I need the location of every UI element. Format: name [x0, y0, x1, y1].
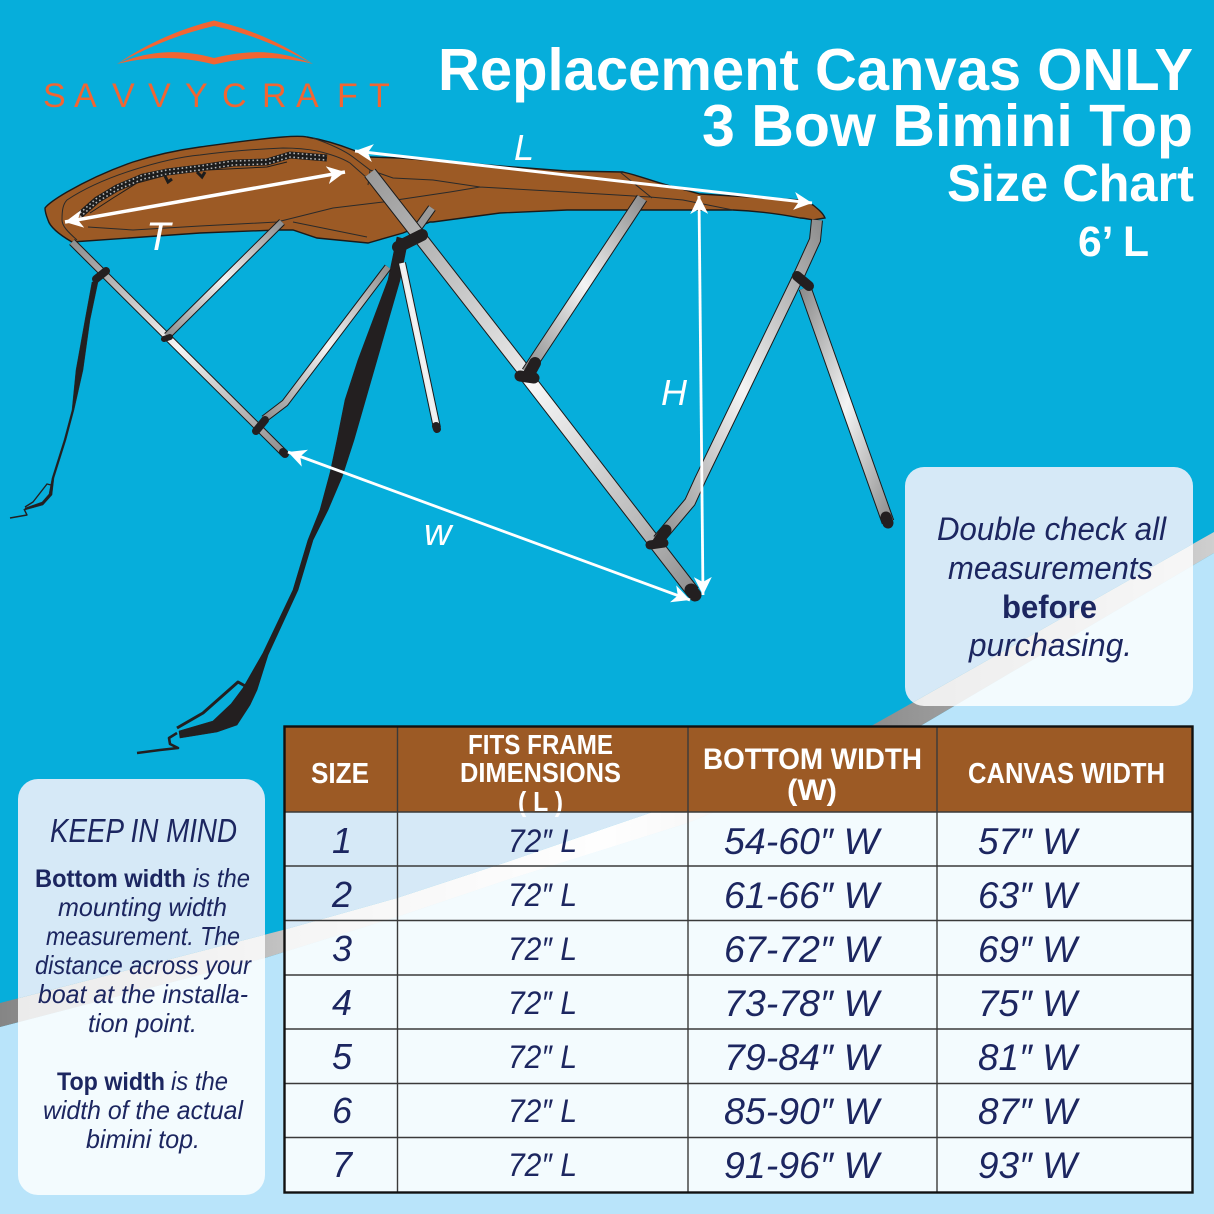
- main strap: [137, 237, 408, 753]
- arrow: H (height): [661, 196, 703, 595]
- text: top width note: width of the actual: [43, 1095, 244, 1125]
- frame clamps: back bow: [96, 271, 437, 454]
- title: Replacement Canvas ONLY: [438, 37, 1193, 103]
- table row 7: 72″ L: [508, 1147, 577, 1183]
- frame tubes: front bows: [370, 173, 888, 592]
- table header: SIZE: [311, 758, 369, 790]
- text: top width note: [43, 1066, 244, 1154]
- panel: double check callout: measurements: [948, 550, 1153, 586]
- table row 5: [332, 1036, 1080, 1078]
- size chart table: [284, 726, 1192, 1192]
- frame clamps: front bows: [398, 235, 888, 595]
- label: T: T: [146, 215, 173, 259]
- table row 7: [332, 1144, 1080, 1186]
- table row 4: 75″ W: [978, 983, 1080, 1024]
- table row 2: 72″ L: [508, 877, 577, 913]
- table row 6: 87″ W: [978, 1091, 1080, 1132]
- table header: (W): [787, 774, 837, 807]
- table header: BOTTOM WIDTH: [703, 743, 922, 776]
- panel: keep in mind: [18, 779, 265, 1195]
- table row 3: 67-72″ W: [724, 929, 882, 970]
- text: bottom width note: distance across your: [35, 950, 252, 980]
- table row 4: 4: [332, 982, 352, 1023]
- table row 1: 72″ L: [508, 823, 577, 859]
- table header: [285, 727, 1192, 817]
- left strap: [10, 282, 98, 518]
- text: bottom width note: mounting width: [58, 892, 227, 922]
- table header: FITS FRAME: [468, 729, 613, 760]
- frame tubes: back bow: [72, 222, 437, 453]
- table row 7: 7: [332, 1144, 354, 1185]
- table row 3: 3: [332, 928, 352, 969]
- text: bottom width note: boat at the installa-: [38, 979, 248, 1009]
- table row 1: 1: [332, 820, 352, 861]
- table row 6: 85-90″ W: [724, 1091, 882, 1132]
- table body background: [285, 812, 1192, 1192]
- arrow: T (top width): [65, 172, 345, 259]
- panel: double check callout: before: [1002, 589, 1097, 625]
- label: w: w: [424, 512, 454, 554]
- zipper: [80, 153, 327, 217]
- table row 4: [332, 982, 1080, 1024]
- arrow: L (length): [355, 127, 812, 203]
- text: bottom width note: [35, 863, 252, 1038]
- table row 2: 2: [331, 874, 352, 915]
- panel: double check callout: Double check all: [937, 511, 1167, 547]
- table header: ( L ): [518, 786, 563, 817]
- text: top width note: bimini top.: [86, 1124, 200, 1154]
- text: bottom width note: is the: [193, 863, 250, 893]
- table row 3: [332, 928, 1080, 970]
- table header: CANVAS WIDTH: [968, 758, 1165, 790]
- table row 5: 81″ W: [978, 1037, 1080, 1078]
- text: bottom width note: measurement. The: [46, 921, 240, 951]
- table row 6: [332, 1090, 1080, 1132]
- table row 6: 6: [332, 1090, 353, 1131]
- text: bottom width note: tion point.: [88, 1008, 197, 1038]
- logo wordmark: SAVVYCRAFT: [43, 77, 390, 115]
- label: L: L: [514, 127, 534, 168]
- icon: canopy mark: [117, 20, 313, 64]
- text: top width note: Top width: [57, 1068, 165, 1096]
- table row 3: 72″ L: [508, 931, 577, 967]
- title: 6’ L: [1078, 218, 1149, 266]
- table row 5: 5: [332, 1036, 353, 1077]
- canvas: [45, 136, 825, 243]
- table row 4: 73-78″ W: [724, 983, 882, 1024]
- label: H: H: [661, 372, 688, 413]
- table row 5: 72″ L: [508, 1039, 577, 1075]
- table row 1: 54-60″ W: [724, 821, 882, 862]
- text: bottom width note: Bottom width: [35, 865, 186, 893]
- arrow: W (bottom width): [288, 452, 690, 600]
- panel: double check callout: [905, 467, 1193, 706]
- table row 2: 63″ W: [978, 875, 1080, 916]
- table header: DIMENSIONS: [460, 757, 621, 788]
- table row 2: [331, 874, 1080, 916]
- title: [438, 37, 1194, 266]
- panel heading: KEEP IN MIND: [50, 812, 237, 849]
- text: top width note: is the: [171, 1066, 228, 1096]
- table row 4: 72″ L: [508, 985, 577, 1021]
- table row 1: 57″ W: [978, 821, 1080, 862]
- table row 6: 72″ L: [508, 1093, 577, 1129]
- table row 7: 93″ W: [978, 1145, 1080, 1186]
- illustration: bimini top: [10, 136, 888, 753]
- logo: Savvycraft: [43, 20, 390, 115]
- table row 7: 91-96″ W: [724, 1145, 882, 1186]
- panel: double check callout: purchasing.: [968, 627, 1132, 663]
- table row 1: [332, 820, 1080, 862]
- table row 2: 61-66″ W: [724, 875, 882, 916]
- title: 3 Bow Bimini Top: [702, 93, 1193, 159]
- table row 5: 79-84″ W: [724, 1037, 882, 1078]
- table row 3: 69″ W: [978, 929, 1080, 970]
- title: Size Chart: [947, 155, 1194, 213]
